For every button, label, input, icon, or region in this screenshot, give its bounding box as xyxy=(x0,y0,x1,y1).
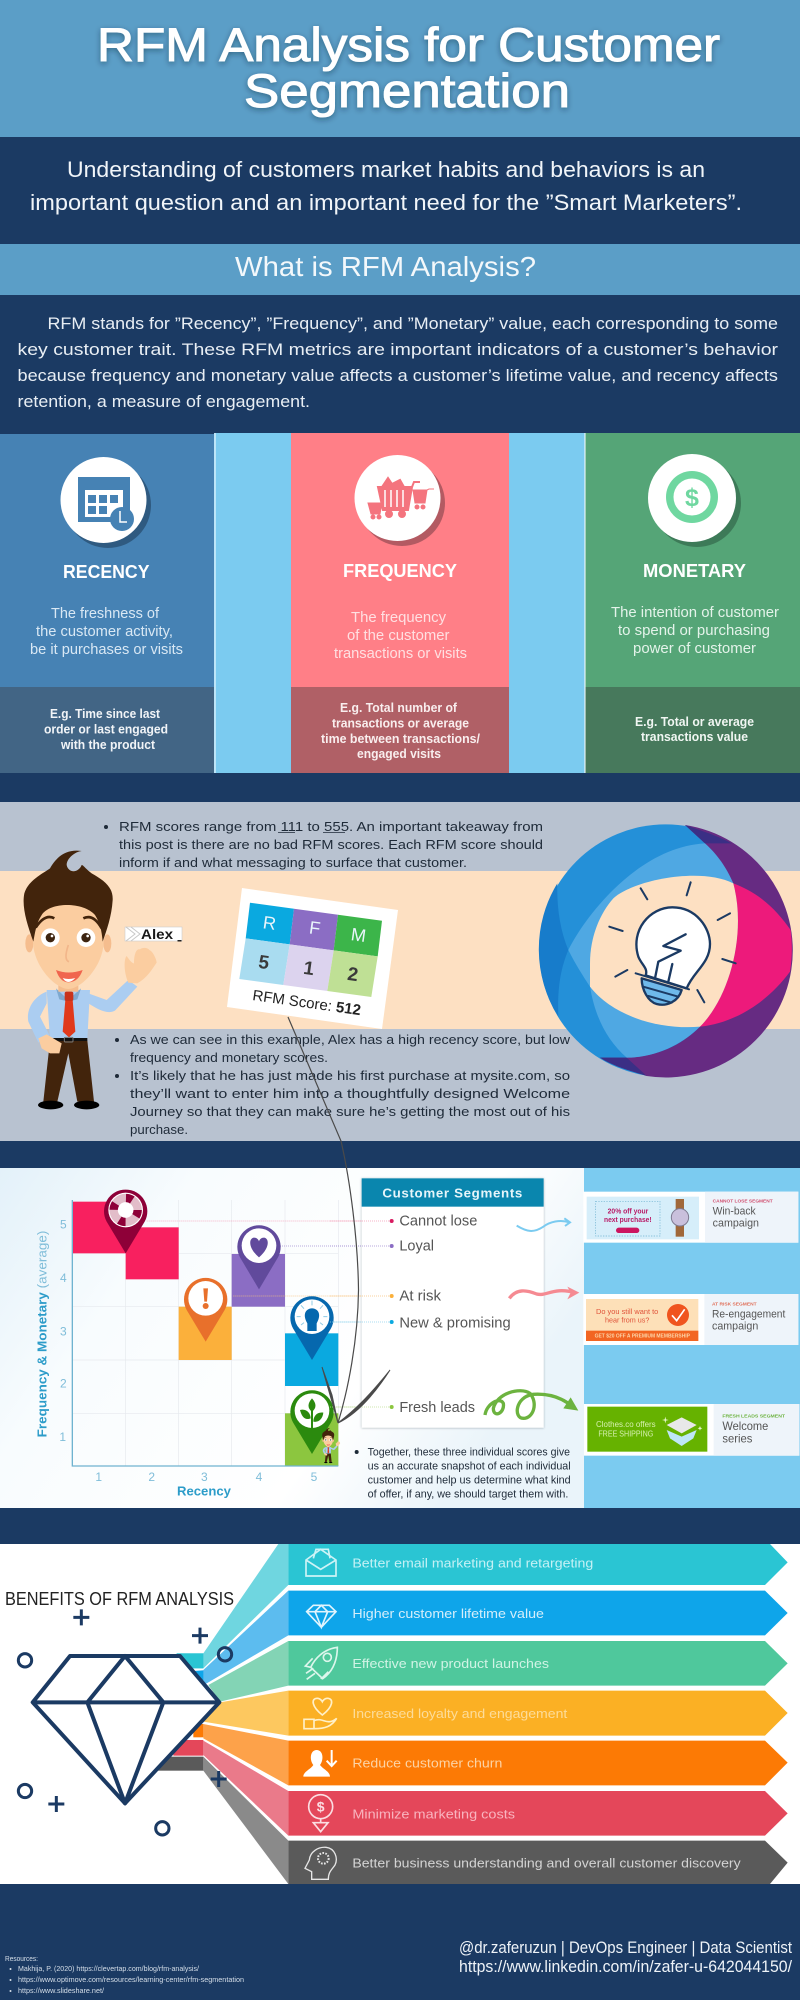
card: re-engagement campaign: GET $20 OFF A PREMIUM MEMBERSHIP xyxy=(595,1334,690,1340)
card: welcome series: Welcome xyxy=(722,1420,768,1433)
card: win-back campaign: campaign xyxy=(713,1218,759,1230)
heading band: What is RFM Analysis?: What is RFM Analysis? xyxy=(235,251,536,282)
text: monetary example: E.g. Total or average xyxy=(635,714,754,729)
arrow: blue squiggle xyxy=(517,1218,570,1231)
card: re-engagement campaign xyxy=(583,1294,798,1345)
arrow: marketing costs: $ xyxy=(317,1799,325,1815)
list: segment names: Cannot lose xyxy=(399,1214,477,1230)
card: re-engagement campaign: campaign xyxy=(712,1320,758,1332)
x axis ticks: 3 xyxy=(201,1470,208,1484)
text: together bullet xyxy=(355,1446,571,1500)
intro statement xyxy=(30,157,742,215)
definition paragraph: RFM stands for ”Recency”, ”Frequency”, and ”Monetary” value, each corresponding to some xyxy=(48,314,778,333)
panel: monetary xyxy=(586,433,800,773)
y axis ticks: 2 xyxy=(60,1377,67,1391)
text: frequency description xyxy=(334,609,467,662)
connector: callout lines from score card and Alex xyxy=(288,1017,390,1423)
definition paragraph: because frequency and monetary value affects a customer’s lifetime value, and recency affects xyxy=(18,366,778,385)
arrow: pink squiggle xyxy=(509,1287,579,1299)
text: frequency description: The frequency xyxy=(351,609,446,626)
list: segment names: Loyal xyxy=(399,1239,434,1255)
icon: shopping carts xyxy=(368,478,434,518)
panel: benefits section xyxy=(0,1544,800,1884)
text: together bullet: customer and help us determine what kind xyxy=(368,1474,571,1486)
text: example explanation bullets xyxy=(115,1032,571,1137)
arrow: business understanding xyxy=(288,1841,788,1884)
arrow: loyalty xyxy=(288,1691,788,1736)
dots: segment colours xyxy=(390,1219,394,1409)
text: together bullet: Together, these three individual scores give xyxy=(368,1446,570,1458)
cells: segments xyxy=(72,1202,338,1466)
arrow: lifetime value xyxy=(288,1591,788,1635)
text: recency description: be it purchases or visits xyxy=(30,641,183,658)
heading band: What is RFM Analysis? xyxy=(0,244,800,295)
pin: fresh leads xyxy=(290,1390,334,1454)
text: RFM letters: M xyxy=(350,924,367,946)
card: re-engagement campaign: Re-engagement xyxy=(712,1308,785,1320)
panel: recency xyxy=(0,434,214,773)
pin: loyal xyxy=(237,1225,281,1289)
text: monetary description: The intention of customer xyxy=(611,604,779,621)
arrow: marketing costs xyxy=(288,1791,788,1836)
icon: light bulb in circle xyxy=(539,824,793,1077)
chart: benefit wedges xyxy=(157,1544,288,1884)
text: recency description xyxy=(30,605,183,658)
text: score digits: 2 xyxy=(346,964,359,986)
pin: at risk xyxy=(184,1278,227,1342)
text: score digits: 5 xyxy=(257,952,271,974)
text: monetary description xyxy=(611,604,779,657)
definition paragraph: key customer trait. These RFM metrics are important indicators of a customer’s behavior xyxy=(18,340,778,359)
card: welcome series: FRESH LEADS SEGMENT xyxy=(722,1413,785,1419)
text: frequency example: E.g. Total number of xyxy=(340,700,458,715)
bulb xyxy=(609,882,736,1005)
title: Segmentation xyxy=(244,64,570,117)
y axis ticks: 5 xyxy=(60,1217,67,1231)
card: re-engagement campaign: Do you still want to xyxy=(596,1307,658,1316)
y axis ticks: 4 xyxy=(60,1271,67,1285)
text: recency description: the customer activity, xyxy=(36,623,173,640)
text: example explanation bullets: they’ll want to enter him into a thoughtfully designed Welcome xyxy=(130,1086,570,1101)
chart: benefit arrows xyxy=(288,1544,788,1884)
arrow: loyalty: Increased loyalty and engagement xyxy=(352,1707,568,1721)
text: frequency description: of the customer xyxy=(347,627,450,644)
heading: monetary: MONETARY xyxy=(643,560,747,581)
card: welcome series xyxy=(584,1404,799,1456)
icon: dollar coin: $ xyxy=(685,484,699,512)
y axis ticks: 3 xyxy=(60,1324,67,1338)
text: frequency description: transactions or visits xyxy=(334,645,467,662)
illustration: Alex character xyxy=(24,851,157,1109)
definition paragraph: retention, a measure of engagement. xyxy=(18,392,310,411)
arrow: churn xyxy=(288,1741,788,1785)
x axis ticks: 4 xyxy=(256,1470,263,1484)
x axis ticks: 2 xyxy=(148,1470,155,1484)
arrow: marketing costs: Minimize marketing costs xyxy=(352,1807,515,1821)
title xyxy=(97,18,720,117)
text: RFM letters: R xyxy=(262,912,277,934)
connectors: dotted leader lines xyxy=(147,1221,392,1407)
icon: dollar coin xyxy=(666,471,718,523)
panel: RFM columns xyxy=(0,433,800,773)
arrow: business understanding: Better business understanding and overall customer discovery xyxy=(352,1857,741,1871)
x axis ticks: 5 xyxy=(311,1470,318,1484)
card: win-back campaign xyxy=(583,1192,798,1243)
card: win-back campaign: Win-back xyxy=(713,1205,756,1217)
x axis ticks: 1 xyxy=(95,1470,102,1484)
text: monetary example xyxy=(635,714,754,744)
pin: new and promising xyxy=(290,1296,334,1360)
y axis ticks xyxy=(59,1217,67,1444)
list: segment names xyxy=(399,1214,511,1416)
text: score range bullet: RFM scores range from 111 to 555. An important takeaway from xyxy=(119,819,543,834)
text: together bullet: us an accurate snapshot of each individual xyxy=(368,1460,571,1472)
text: RFM letters: F xyxy=(308,917,322,939)
footer: resources: Makhija, P. (2020) https://clevertap.com/blog/rfm-analysis/ xyxy=(18,1964,200,1973)
card: re-engagement campaign: hear from us? xyxy=(605,1316,649,1325)
y axis label: Frequency & Monetary (average) xyxy=(36,1231,50,1437)
arrow: email marketing: Better email marketing and retargeting xyxy=(352,1556,593,1570)
text: frequency example xyxy=(321,700,480,761)
icon: diamond with sparkles xyxy=(18,1609,232,1835)
panel: segmentation chart section xyxy=(0,1168,800,1508)
pin: cannot lose xyxy=(104,1190,147,1253)
footer: resources: Resources: xyxy=(5,1954,38,1963)
text: example explanation bullets: purchase. xyxy=(130,1122,188,1137)
arrow: churn: Reduce customer churn xyxy=(352,1756,502,1770)
text: recency description: The freshness of xyxy=(51,605,160,622)
x axis ticks xyxy=(95,1470,318,1484)
text: example explanation bullets: frequency and monetary scores. xyxy=(130,1050,328,1065)
text: RFM letters xyxy=(262,912,367,946)
text: monetary description: power of customer xyxy=(633,640,756,657)
arrow: product launches: Effective new product launches xyxy=(352,1657,549,1671)
x axis label: Recency xyxy=(177,1484,232,1499)
card: win-back campaign: next purchase! xyxy=(604,1215,652,1224)
text: recency example xyxy=(44,706,168,752)
card: re-engagement campaign: AT RISK SEGMENT xyxy=(712,1302,757,1308)
footer: resources: https://www.optimove.com/resources/learning-center/rfm-segmentation xyxy=(18,1975,244,1984)
arrow: email marketing xyxy=(288,1544,788,1585)
heading: benefits of RFM analysis: BENEFITS OF RFM ANALYSIS xyxy=(5,1588,234,1609)
footer: author credit xyxy=(459,1938,792,1976)
definition paragraph xyxy=(18,314,778,411)
title banner xyxy=(0,0,800,137)
text: RFM score: RFM Score: 512 xyxy=(251,987,362,1019)
card: welcome series: FREE SHIPPING xyxy=(598,1430,653,1439)
panel: frequency xyxy=(291,433,509,773)
text: recency example: with the product xyxy=(60,737,156,752)
text: score range bullet: this post is there are no bad RFM scores. Each RFM score should xyxy=(119,837,543,852)
card: customer segments xyxy=(330,1178,799,1500)
icon: calendar xyxy=(78,477,134,531)
text: example explanation bullets: Journey so that they can make sure he’s getting the most out of his xyxy=(130,1104,571,1119)
intro statement: Understanding of customers market habits and behaviors is an xyxy=(67,157,705,182)
text: monetary description: to spend or purchasing xyxy=(618,622,770,639)
intro statement: important question and an important need for the ”Smart Marketers”. xyxy=(30,190,742,215)
icon: mini Alex on chart xyxy=(322,1428,340,1463)
text: recency example: order or last engaged xyxy=(44,722,168,736)
card: welcome series: series xyxy=(722,1433,752,1446)
arrow: green loops xyxy=(485,1391,578,1418)
footer: resources: https://www.slideshare.net/ xyxy=(18,1986,105,1995)
card: win-back campaign: 20% off your xyxy=(608,1206,648,1215)
text: frequency example: time between transactions/ xyxy=(321,731,480,746)
text: monetary example: transactions value xyxy=(641,729,748,744)
list: segment names: Fresh leads xyxy=(399,1400,475,1416)
text: frequency example: engaged visits xyxy=(357,746,441,761)
connectors: leader lines inside card xyxy=(330,1221,389,1407)
chart: recency vs frequency grid xyxy=(36,1190,392,1499)
arrow: product launches xyxy=(288,1641,788,1686)
text: score digits: 1 xyxy=(302,958,316,980)
heading: recency: RECENCY xyxy=(63,561,150,582)
text: together bullet: of offer, if any, we should target them with. xyxy=(368,1488,568,1500)
text: score range bullet xyxy=(104,819,543,870)
label: Alex name tag xyxy=(125,926,182,942)
list: segment names: At risk xyxy=(399,1289,442,1305)
footer: resources xyxy=(5,1954,244,1995)
heading: frequency: FREQUENCY xyxy=(343,560,458,581)
card: RFM score xyxy=(227,888,398,1029)
card: win-back campaign: CANNOT LOSE SEGMENT xyxy=(713,1199,773,1205)
list: segment names: New & promising xyxy=(399,1315,511,1331)
arrow: lifetime value: Higher customer lifetime value xyxy=(352,1607,544,1621)
card: customer segments: Customer Segments xyxy=(382,1185,522,1200)
text: frequency example: transactions or average xyxy=(332,716,469,730)
y axis ticks: 1 xyxy=(59,1430,66,1444)
text: recency example: E.g. Time since last xyxy=(50,706,161,721)
title: RFM Analysis for Customer xyxy=(97,18,720,71)
text: example explanation bullets: As we can see in this example, Alex has a high recency score, but low xyxy=(130,1032,571,1047)
panel: example bands xyxy=(0,802,800,1141)
text: score range bullet: inform if and what messaging to surface that customer. xyxy=(119,855,467,870)
text: score digits xyxy=(257,952,359,986)
label: Alex name tag: Alex xyxy=(141,926,173,942)
card: welcome series: Clothes.co offers xyxy=(596,1420,656,1429)
text: example explanation bullets: It’s likely that he has just made his first purchase at mysite.com, so xyxy=(130,1068,570,1083)
